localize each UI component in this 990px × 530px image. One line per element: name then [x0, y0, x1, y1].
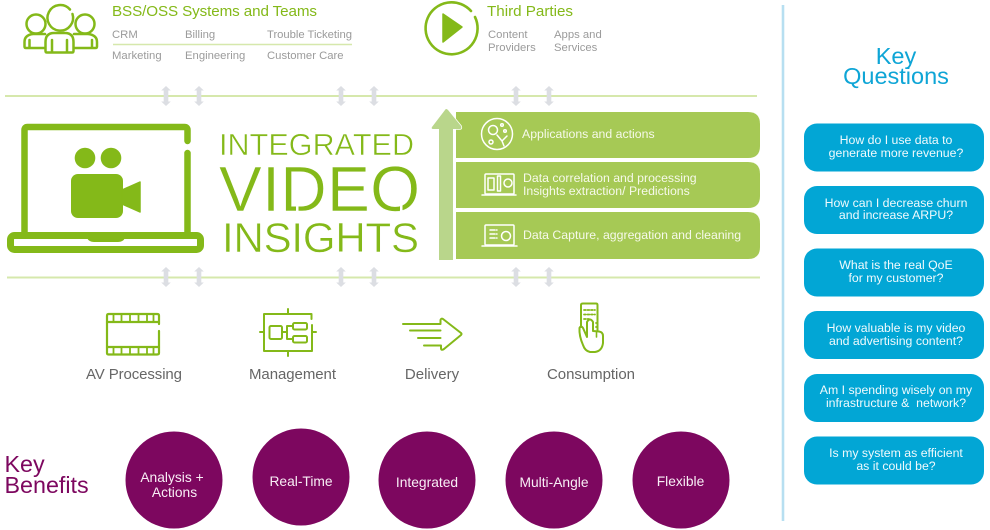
question 1: How do I use data to — [840, 133, 953, 147]
bar: applications and actions — [456, 112, 760, 158]
title: integrated video insights: INSIGHTS — [222, 214, 419, 261]
question 1: generate more revenue? — [829, 146, 963, 160]
title: integrated video insights: VIDEO — [219, 153, 420, 225]
benefit: multi-angle — [506, 432, 602, 528]
arrow: upward stack arrow — [432, 109, 461, 260]
arrows: upper connectors — [161, 86, 554, 106]
panel: layered stack — [456, 112, 760, 259]
benefit: real-time: Real-Time — [269, 474, 333, 489]
question 4 — [804, 311, 984, 359]
heading: key benefits: Key — [4, 451, 45, 477]
list: BSS/OSS top row: CRM — [112, 29, 138, 41]
heading: key questions: Questions — [843, 63, 949, 89]
text: apps and services: Services — [554, 42, 598, 54]
bar: data correlation: Insights extraction/ Predictions — [523, 184, 690, 198]
question 2: and increase ARPU? — [839, 208, 953, 222]
bar: data capture — [456, 212, 760, 259]
icon: team of people — [24, 5, 97, 53]
benefit: integrated — [378, 432, 476, 528]
label: AV Processing: AV Processing — [86, 366, 182, 383]
question 3: What is the real QoE — [839, 258, 953, 272]
list: BSS/OSS top row: Billing — [185, 29, 215, 41]
benefit: analysis + actions: Actions — [152, 485, 197, 500]
list: BSS/OSS bottom row — [112, 50, 344, 62]
title: integrated video insights — [219, 128, 420, 261]
icon: play button — [426, 2, 478, 54]
question 2 — [804, 186, 984, 234]
question 3: for my customer? — [849, 271, 944, 285]
list: BSS/OSS bottom row: Customer Care — [267, 50, 344, 62]
list: BSS/OSS top row — [112, 29, 352, 41]
label: Delivery: Delivery — [405, 366, 460, 383]
benefit: flexible — [632, 432, 730, 528]
question 3 — [804, 248, 984, 296]
label: Consumption: Consumption — [547, 366, 635, 383]
question 6: Is my system as efficient — [829, 446, 963, 460]
list: BSS/OSS top row: Trouble Ticketing — [267, 29, 352, 41]
panel: BSS/OSS systems and teams — [112, 3, 352, 62]
benefit: flexible: Flexible — [657, 474, 705, 489]
text: apps and services: Apps and — [554, 29, 602, 41]
benefit: real-time — [252, 428, 350, 526]
icon: dashboard laptop — [482, 174, 516, 195]
bar: data correlation — [456, 162, 760, 208]
heading: BSS/OSS: BSS/OSS Systems and Teams — [112, 3, 317, 20]
question 6: as it could be? — [856, 459, 936, 473]
icon: list laptop — [482, 225, 517, 246]
icon: laptop with video camera — [10, 127, 200, 250]
question 6 — [804, 436, 984, 484]
heading: third parties: Third Parties — [487, 3, 573, 20]
question 2: How can I decrease churn — [825, 196, 968, 210]
bar: data capture: Data Capture, aggregation and cleaning — [523, 228, 741, 242]
question 5: Am I spending wisely on my — [820, 383, 973, 397]
list: BSS/OSS bottom row: Engineering — [185, 50, 245, 62]
benefit: analysis + actions: Analysis + — [140, 470, 204, 485]
arrows: lower connectors — [161, 267, 554, 287]
icon: hand on remote control — [579, 304, 603, 352]
question 5: infrastructure & network? — [826, 396, 966, 410]
question 1 — [804, 124, 984, 172]
bar: data correlation: Data correlation and processing — [523, 171, 697, 185]
benefit: multi-angle: Multi-Angle — [519, 475, 589, 490]
heading: key questions: Key — [876, 43, 916, 69]
text: content providers: Content — [488, 29, 528, 41]
panel: third parties — [487, 3, 602, 54]
question 4: and advertising content? — [829, 334, 963, 348]
label: Management: Management — [249, 366, 337, 383]
icon: delivery arrow — [403, 319, 462, 350]
icon: gears and wrench — [482, 118, 512, 150]
title: integrated video insights: INTEGRATED — [219, 128, 414, 162]
icon: management block diagram — [260, 309, 316, 356]
question 5 — [804, 374, 984, 422]
bar: applications and actions: Applications and actions — [522, 127, 655, 141]
benefit: analysis + actions — [126, 432, 222, 528]
list: BSS/OSS bottom row: Marketing — [112, 50, 162, 62]
heading: key benefits: Benefits — [4, 472, 89, 498]
text: content providers: Providers — [488, 42, 536, 54]
benefit: integrated: Integrated — [396, 475, 458, 490]
icon: film strip — [107, 314, 159, 354]
question 4: How valuable is my video — [827, 321, 966, 335]
